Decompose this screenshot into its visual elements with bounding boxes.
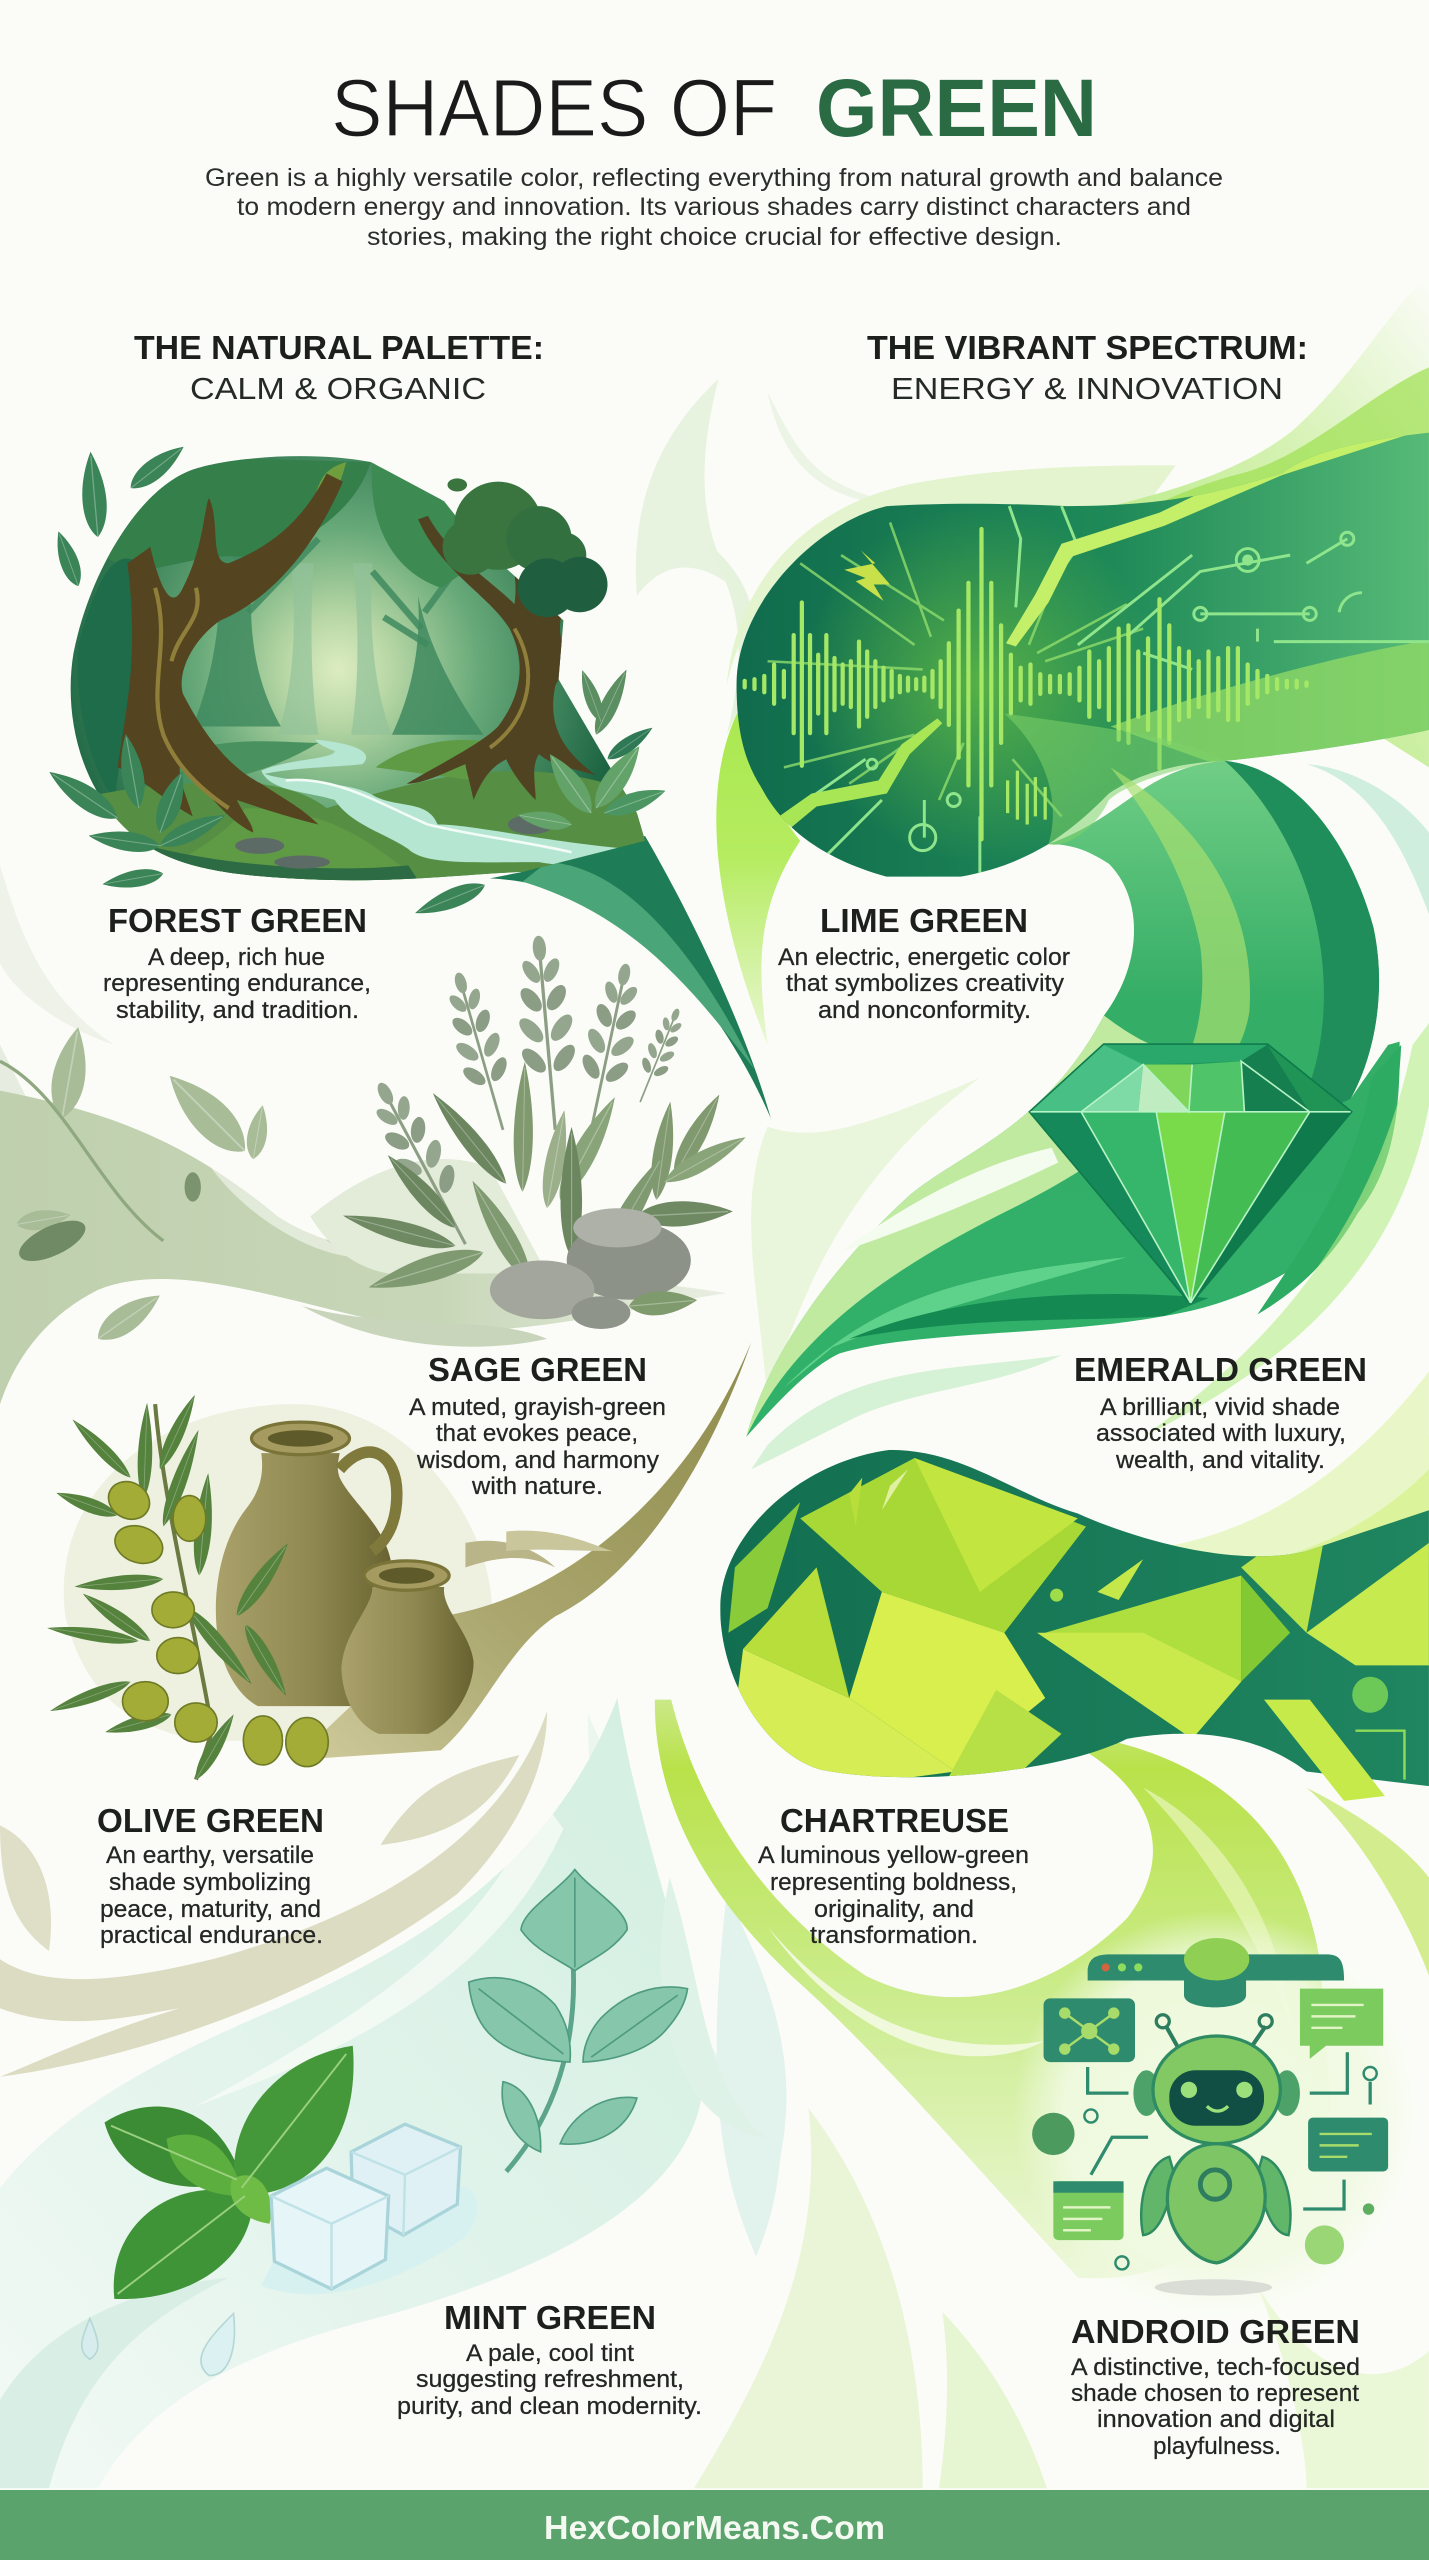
chartreuse flow downstream: [655, 1371, 1429, 2278]
moss ground: [101, 771, 645, 880]
icon: emerald diamond: [1030, 1045, 1351, 1303]
foliage leaves: [43, 439, 669, 922]
small bar cluster: [1008, 771, 1045, 825]
text: chartreuse: representing boldness,: [770, 1869, 1017, 1896]
text: lime green: An electric, energetic color: [778, 944, 1070, 971]
lavender stalks: [354, 933, 693, 1258]
antennas: [1166, 2026, 1266, 2052]
text: lime green: and nonconformity.: [818, 997, 1031, 1024]
mint plant: [469, 1869, 688, 2171]
heading: the natural palette: [134, 329, 544, 406]
water drops: [82, 2318, 98, 2359]
text: chartreuse: CHARTREUSE: [780, 1802, 1009, 1839]
top-right lime band: [716, 274, 1429, 1045]
heading: the vibrant spectrum: [867, 329, 1308, 406]
text: forest green: stability, and tradition.: [116, 997, 359, 1024]
chat panel: [1300, 1989, 1383, 2059]
code panel: [1308, 2118, 1388, 2171]
heading: the vibrant spectrum: THE VIBRANT SPECTRUM:: [867, 329, 1308, 366]
text: mint green: MINT GREEN: [444, 2299, 656, 2336]
emerald flow S-curve: [746, 713, 1429, 1469]
text: android green: shade chosen to represent: [1071, 2380, 1359, 2407]
text: lime green: LIME GREEN: [820, 902, 1028, 939]
text: mint green: purity, and clean modernity.: [397, 2393, 702, 2420]
text: android green: A distinctive, tech-focused: [1071, 2354, 1360, 2381]
text: emerald green: A brilliant, vivid shade: [1100, 1394, 1340, 1421]
right tree trunk: [407, 516, 596, 800]
text: chartreuse: originality, and: [814, 1896, 974, 1923]
text: emerald green: wealth, and vitality.: [1115, 1447, 1325, 1474]
text: android green: playfulness.: [1153, 2433, 1281, 2460]
text: olive green: OLIVE GREEN: [97, 1802, 324, 1839]
ears: [1133, 2070, 1160, 2116]
window panel: [1053, 2181, 1124, 2240]
sage branches: [15, 1024, 272, 1349]
browser bar: [1088, 1954, 1344, 1980]
beige flows under olive: [0, 1711, 547, 2077]
text: lime green: [778, 902, 1070, 1024]
network panel: [1044, 1998, 1135, 2062]
distant trees: [196, 556, 484, 735]
text: sage green: that evokes peace,: [436, 1420, 638, 1447]
text: sage green: A muted, grayish-green: [409, 1394, 666, 1421]
text: emerald green: EMERALD GREEN: [1074, 1351, 1367, 1388]
intro text: Green is a highly versatile color, reflecting everything from natural growth and balance: [205, 164, 1223, 192]
big jug: [216, 1453, 393, 1706]
footer bar: [0, 2490, 1429, 2560]
text: olive green: An earthy, versatile: [106, 1842, 314, 1869]
sage flow: [0, 1091, 727, 1404]
small jug: [341, 1587, 474, 1734]
stones: [490, 1208, 698, 1329]
head: [1153, 2036, 1280, 2144]
text: mint green: A pale, cool tint: [466, 2340, 634, 2367]
text: mint green: [397, 2299, 702, 2420]
lime circuit edges: [1006, 436, 1405, 646]
title: SHADES OF: [331, 63, 777, 154]
forest stream tail: [490, 836, 771, 1118]
text: sage green: wisdom, and harmony: [416, 1447, 659, 1474]
text: forest green: [103, 902, 371, 1024]
title: [331, 63, 1097, 154]
mint leaves and ice cubes: [82, 2046, 478, 2376]
icon: android robot and tech panels: [1013, 1910, 1421, 2318]
canopy shapes: [98, 457, 371, 571]
text: sage green: [409, 1351, 666, 1500]
audio waveform: [745, 529, 1306, 839]
text: sage green: SAGE GREEN: [428, 1351, 647, 1388]
panel: forest illustration: [43, 439, 771, 1118]
text: android green: innovation and digital: [1097, 2406, 1335, 2433]
water puddle: [261, 2186, 478, 2294]
olive flow: [294, 1342, 751, 1760]
circuit traces: [784, 506, 1429, 877]
panel: sage illustration: [0, 933, 750, 1404]
panel: olive illustration: [46, 1342, 751, 1783]
text: olive green: shade symbolizing: [109, 1869, 311, 1896]
heading: the natural palette: THE NATURAL PALETTE:: [134, 329, 544, 366]
text: lime green: that symbolizes creativity: [786, 970, 1064, 997]
text: forest green: FOREST GREEN: [108, 902, 367, 939]
heading: the natural palette: CALM & ORGANIC: [190, 371, 486, 406]
pale far trees: [278, 563, 392, 735]
text: olive green: peace, maturity, and: [100, 1896, 321, 1923]
text: chartreuse: transformation.: [810, 1922, 978, 1949]
sage plant leaves: [340, 1061, 750, 1300]
text: olive green: practical endurance.: [100, 1922, 323, 1949]
title: GREEN: [816, 63, 1097, 154]
intro text: stories, making the right choice crucial for effective design.: [367, 223, 1062, 251]
olive branch: [155, 1404, 212, 1780]
ice cube back: [351, 2124, 461, 2235]
text: chartreuse: A luminous yellow-green: [758, 1842, 1029, 1869]
intro text: to modern energy and innovation. Its various shades carry distinct characters and: [237, 193, 1191, 221]
text: olive green: [97, 1802, 324, 1949]
forest stream: [261, 740, 632, 866]
text: sage green: with nature.: [471, 1473, 603, 1500]
text: forest green: representing endurance,: [103, 970, 371, 997]
text: forest green: A deep, rich hue: [148, 944, 325, 971]
radiating rays: [768, 522, 1143, 816]
text: emerald green: associated with luxury,: [1096, 1420, 1346, 1447]
shadow: [1155, 2279, 1272, 2296]
chartreuse geometric panel: [719, 1437, 1429, 1801]
pale disc: [64, 1404, 492, 1741]
connectors: [1088, 2052, 1370, 2209]
text: android green: [1071, 2313, 1360, 2460]
ice cube front: [271, 2168, 389, 2289]
tree crown: [443, 478, 608, 617]
heading: the vibrant spectrum: ENERGY & INNOVATION: [891, 371, 1283, 406]
left tree trunk: [118, 473, 343, 833]
text: android green: ANDROID GREEN: [1071, 2313, 1360, 2350]
text: chartreuse: [758, 1802, 1029, 1949]
arms: [1141, 2157, 1176, 2235]
footer bar: HexColorMeans.Com: [544, 2509, 885, 2546]
mint leaves: [105, 2106, 242, 2187]
lightning bolt: [844, 550, 890, 601]
intro text: [205, 164, 1223, 251]
body: [1167, 2144, 1265, 2263]
text: emerald green: [1074, 1351, 1367, 1474]
text: mint green: suggesting refreshment,: [416, 2366, 684, 2393]
mint flow: [0, 1698, 768, 2488]
lime green circuit panel: [736, 432, 1429, 877]
